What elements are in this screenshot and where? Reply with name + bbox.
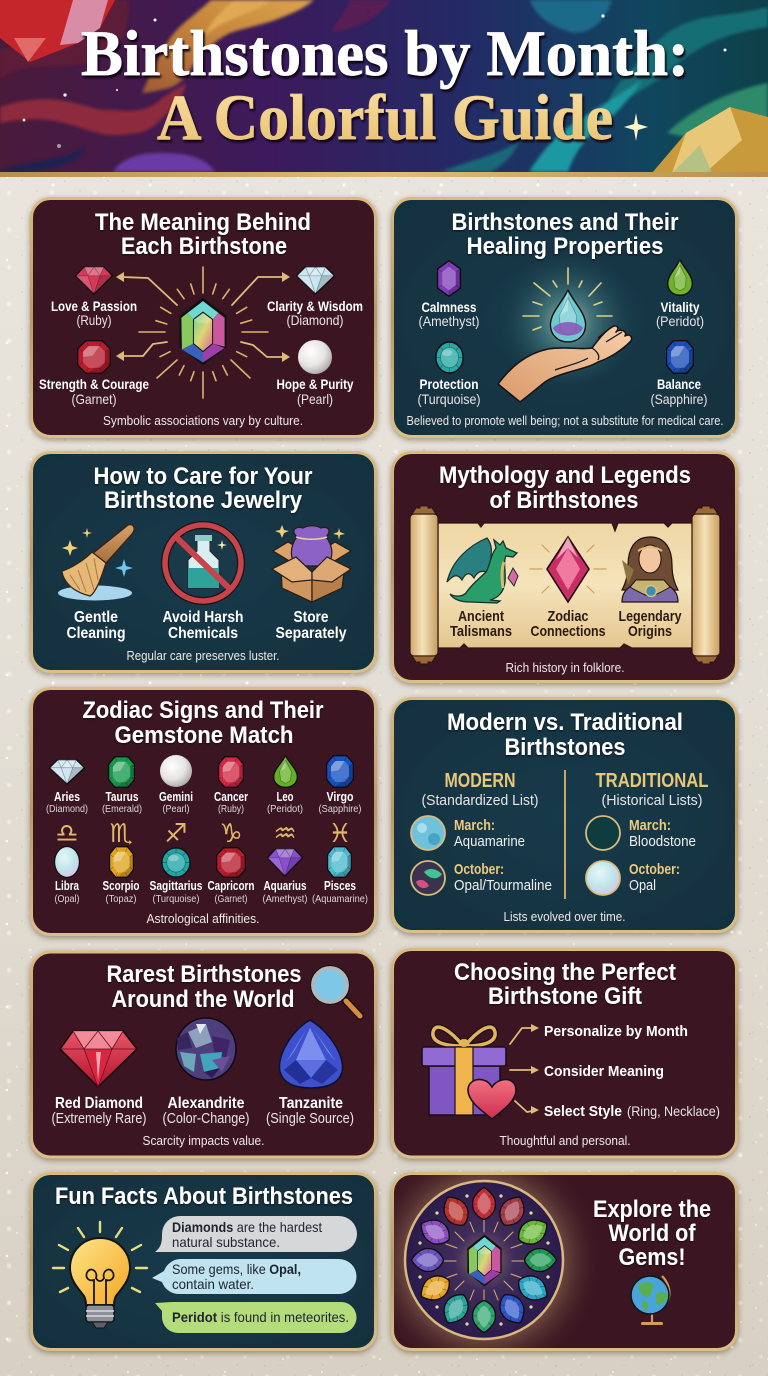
sign names row one: Cancer bbox=[214, 789, 248, 804]
icon: peridot bbox=[668, 260, 692, 295]
heading: explore: Gems! bbox=[618, 1244, 686, 1271]
column: modern bbox=[411, 770, 552, 895]
label: zodiac connections: Zodiac bbox=[548, 608, 588, 625]
note: zodiac: Astrological affinities. bbox=[146, 911, 260, 926]
icon: zodiac gem bbox=[530, 537, 606, 602]
tip: select style: (Ring, Necklace) bbox=[627, 1103, 720, 1119]
label: store separately: Store bbox=[294, 609, 329, 626]
note: mythology: Rich history in folklore. bbox=[506, 660, 624, 675]
sign names row two: Libra bbox=[55, 878, 80, 893]
heading: rarest: Rarest Birthstones bbox=[106, 961, 302, 988]
icon: light bulb bbox=[53, 1222, 147, 1328]
sign names row one: Gemini bbox=[159, 789, 193, 804]
label: balance: (Sapphire) bbox=[650, 391, 708, 407]
glow behind gem wheel bbox=[394, 1175, 587, 1348]
sign names row one: Leo bbox=[276, 789, 294, 804]
title: A Colorful Guide bbox=[157, 82, 613, 154]
label: strength and courage: (Garnet) bbox=[72, 391, 116, 407]
label: balance bbox=[650, 376, 708, 407]
sign names row two bbox=[54, 878, 368, 905]
scroll parchment bbox=[410, 506, 720, 664]
heading: healing: Healing Properties bbox=[466, 233, 664, 260]
column: modern: (Standardized List) bbox=[422, 792, 538, 809]
zodiac symbols: ♑︎ bbox=[219, 819, 243, 849]
label: love and passion: (Ruby) bbox=[76, 312, 112, 328]
column: traditional: March: bbox=[629, 817, 671, 834]
sign names row two: (Topaz) bbox=[106, 894, 136, 905]
zodiac symbols bbox=[55, 819, 352, 849]
sign names row one bbox=[46, 789, 362, 815]
arrows to gift tips bbox=[510, 1024, 539, 1114]
panel: zodiac signs bbox=[32, 688, 376, 934]
panel: meaning behind each birthstone bbox=[32, 198, 376, 436]
sign names row two: (Amethyst) bbox=[262, 894, 308, 905]
label: legendary origins: Legendary bbox=[618, 608, 682, 625]
sign names row two: (Opal) bbox=[54, 894, 80, 905]
label: red diamond bbox=[52, 1095, 146, 1127]
icon: pearl bbox=[298, 340, 332, 374]
gem row two bbox=[54, 846, 352, 878]
icon: turquoise bbox=[436, 342, 463, 373]
icon: amethyst bbox=[438, 261, 460, 296]
label: avoid harsh chemicals: Avoid Harsh bbox=[162, 609, 244, 626]
column: modern: March: bbox=[454, 817, 495, 834]
icon: gift box and heart bbox=[422, 1027, 516, 1119]
heading: mythology: Mythology and Legends bbox=[439, 462, 691, 489]
heading: modern vs traditional bbox=[447, 709, 683, 761]
sign names row two: Scorpio bbox=[102, 878, 140, 893]
tip: consider meaning: Consider Meaning bbox=[544, 1063, 664, 1080]
heading: explore bbox=[593, 1196, 711, 1271]
label: alexandrite: (Color-Change) bbox=[162, 1110, 250, 1127]
zodiac symbols: ♎︎ bbox=[55, 819, 79, 849]
heading: healing bbox=[452, 209, 678, 260]
speech bubble: peridot bbox=[155, 1302, 356, 1333]
icon: magnifying glass bbox=[310, 966, 360, 1016]
label: strength and courage: Strength & Courage bbox=[39, 376, 149, 392]
label: alexandrite: Alexandrite bbox=[168, 1095, 245, 1112]
label: avoid harsh chemicals bbox=[162, 609, 244, 642]
icon: alexandrite bbox=[176, 1018, 236, 1080]
label: hope and purity bbox=[276, 376, 354, 407]
label: protection: Protection bbox=[420, 376, 478, 392]
label: calmness: (Amethyst) bbox=[418, 313, 480, 329]
label: legendary origins: Origins bbox=[628, 623, 672, 640]
tip: select style: Select Style bbox=[544, 1103, 622, 1120]
heading: mythology: of Birthstones bbox=[490, 487, 638, 514]
label: vitality bbox=[656, 299, 704, 329]
note: care: Regular care preserves luster. bbox=[126, 648, 280, 663]
panel: jewelry care bbox=[32, 452, 376, 672]
icon: tanzanite bbox=[279, 1020, 343, 1088]
sign names row one: (Diamond) bbox=[46, 804, 88, 815]
label: red diamond: Red Diamond bbox=[55, 1095, 143, 1112]
label: zodiac connections: Connections bbox=[530, 623, 606, 640]
label: gentle cleaning: Cleaning bbox=[66, 625, 126, 642]
panel: rarest birthstones bbox=[32, 952, 376, 1157]
icon: red diamond bbox=[60, 1031, 137, 1087]
tip: select style bbox=[544, 1103, 720, 1120]
sign names row two: (Aquamarine) bbox=[312, 894, 368, 905]
label: vitality: Vitality bbox=[660, 299, 700, 315]
speech bubble: opal: Some gems, like Opal, bbox=[172, 1261, 301, 1277]
heading: modern vs traditional: Birthstones bbox=[504, 734, 626, 761]
note: healing: Believed to promote well being; not a substitute for medical care. bbox=[406, 413, 724, 428]
panel: explore the world of gems bbox=[387, 1170, 742, 1357]
speech bubble: diamonds bbox=[155, 1216, 357, 1252]
column: traditional: TRADITIONAL bbox=[596, 770, 708, 792]
column: modern: Aquamarine bbox=[454, 833, 525, 850]
note: meaning: Symbolic associations vary by culture. bbox=[103, 413, 303, 428]
header banner bbox=[0, 0, 768, 173]
label: love and passion: Love & Passion bbox=[51, 298, 137, 314]
heading: rarest bbox=[106, 961, 302, 1013]
label: hope and purity: Hope & Purity bbox=[276, 376, 354, 392]
heading: zodiac bbox=[82, 697, 324, 749]
label: legendary origins bbox=[618, 608, 682, 640]
zodiac symbols: ♒︎ bbox=[273, 819, 297, 849]
label: protection: (Turquoise) bbox=[418, 391, 480, 407]
panel: healing properties bbox=[392, 198, 736, 436]
heading: zodiac: Gemstone Match bbox=[114, 722, 294, 749]
title bbox=[81, 18, 689, 154]
sign names row one: Taurus bbox=[106, 789, 138, 804]
gem row one bbox=[49, 755, 353, 787]
sign names row two: Aquarius bbox=[264, 878, 306, 893]
heading: healing: Birthstones and Their bbox=[452, 209, 678, 236]
column: modern: October: bbox=[454, 861, 504, 878]
label: protection bbox=[418, 376, 480, 407]
column: traditional bbox=[586, 770, 708, 895]
title: Birthstones by Month: bbox=[81, 18, 689, 90]
label: strength and courage bbox=[39, 376, 149, 407]
tip: personalize: Personalize by Month bbox=[544, 1023, 688, 1040]
icon: gift box with pouch bbox=[272, 525, 351, 602]
zodiac symbols: ♏︎ bbox=[109, 819, 133, 849]
panel: modern vs traditional bbox=[392, 698, 736, 932]
label: store separately bbox=[276, 609, 347, 642]
label: ancient talismans bbox=[450, 608, 512, 640]
heading: gift bbox=[454, 959, 676, 1010]
label: tanzanite bbox=[266, 1095, 354, 1127]
column: modern: MODERN bbox=[444, 770, 516, 792]
speech bubble: opal: contain water. bbox=[172, 1276, 254, 1292]
zodiac symbols: ♓︎ bbox=[328, 819, 352, 849]
heading: explore: World of bbox=[608, 1220, 696, 1247]
heading: zodiac: Zodiac Signs and Their bbox=[82, 697, 324, 724]
sign names row one: Virgo bbox=[326, 789, 354, 804]
sign names row two: Sagittarius bbox=[150, 878, 202, 893]
icon: dragon bbox=[447, 538, 518, 603]
heading: care bbox=[94, 463, 312, 514]
note: rarest: Scarcity impacts value. bbox=[142, 1133, 264, 1148]
heading: meaning bbox=[95, 209, 311, 260]
column: modern: Opal/Tourmaline bbox=[454, 877, 552, 894]
icon: brush with sparkles bbox=[58, 525, 134, 600]
label: zodiac connections bbox=[530, 608, 606, 640]
sign names row two: Capricorn bbox=[208, 878, 255, 893]
label: vitality: (Peridot) bbox=[656, 313, 704, 329]
panel: mythology and legends bbox=[392, 452, 736, 682]
speech bubble: opal bbox=[152, 1259, 356, 1294]
sign names row one: (Emerald) bbox=[102, 804, 142, 815]
heading: gift: Birthstone Gift bbox=[488, 983, 642, 1010]
sign names row one: (Sapphire) bbox=[318, 804, 362, 815]
icon: central gem with rays and arrows bbox=[116, 267, 290, 398]
label: gentle cleaning bbox=[66, 609, 126, 642]
heading: care: Birthstone Jewelry bbox=[104, 487, 303, 514]
label: alexandrite bbox=[162, 1095, 250, 1127]
sign names row one: Aries bbox=[54, 789, 80, 804]
label: love and passion bbox=[51, 298, 137, 328]
heading: explore: Explore the bbox=[593, 1196, 711, 1223]
sparkle on header bbox=[624, 113, 648, 141]
heading: modern vs traditional: Modern vs. Traditional bbox=[447, 709, 683, 736]
sign names row two: (Turquoise) bbox=[152, 894, 200, 905]
label: hope and purity: (Pearl) bbox=[297, 391, 333, 407]
label: avoid harsh chemicals: Chemicals bbox=[168, 625, 238, 642]
heading: gift: Choosing the Perfect bbox=[454, 959, 676, 986]
heading: meaning: The Meaning Behind bbox=[95, 209, 311, 236]
column: traditional: October: bbox=[629, 861, 680, 878]
sign names row one: (Peridot) bbox=[267, 804, 303, 815]
icon: garnet bbox=[78, 341, 110, 373]
label: balance: Balance bbox=[657, 376, 701, 392]
panel: choosing a gift bbox=[392, 950, 736, 1157]
label: gentle cleaning: Gentle bbox=[74, 609, 118, 626]
label: calmness: Calmness bbox=[422, 299, 477, 315]
speech bubble: diamonds: natural substance. bbox=[172, 1234, 280, 1250]
sign names row two: (Garnet) bbox=[214, 894, 248, 905]
label: clarity and wisdom: (Diamond) bbox=[286, 312, 344, 328]
icon: sapphire bbox=[667, 341, 693, 373]
icon: ruby bbox=[75, 267, 113, 294]
label: calmness bbox=[418, 299, 480, 329]
note: modern vs traditional: Lists evolved over time. bbox=[504, 909, 626, 924]
label: ancient talismans: Talismans bbox=[450, 623, 512, 640]
sign names row one: (Pearl) bbox=[162, 804, 190, 815]
label: clarity and wisdom: Clarity & Wisdom bbox=[267, 298, 363, 314]
note: gift: Thoughtful and personal. bbox=[500, 1133, 630, 1148]
label: tanzanite: (Single Source) bbox=[266, 1110, 354, 1127]
icon: gem wheel bbox=[405, 1181, 563, 1339]
column: traditional: Bloodstone bbox=[629, 833, 696, 850]
heading: mythology bbox=[439, 462, 691, 514]
sign names row two: Pisces bbox=[324, 878, 356, 893]
header gold band bbox=[0, 172, 768, 177]
icon: hand holding glowing gem bbox=[496, 250, 640, 402]
label: tanzanite: Tanzanite bbox=[279, 1095, 343, 1112]
speech bubble: diamonds: Diamonds are the hardest bbox=[172, 1219, 322, 1235]
label: store separately: Separately bbox=[276, 625, 347, 642]
icon: diamond bbox=[296, 267, 335, 294]
heading: fun facts: Fun Facts About Birthstones bbox=[55, 1183, 353, 1210]
sign names row one: (Ruby) bbox=[218, 804, 244, 815]
heading: care: How to Care for Your bbox=[94, 463, 312, 490]
icon: legendary woman bbox=[622, 537, 678, 602]
column: traditional: Opal bbox=[629, 877, 656, 894]
heading: meaning: Each Birthstone bbox=[121, 233, 287, 260]
icon: globe bbox=[631, 1276, 669, 1325]
zodiac symbols: ♐︎ bbox=[164, 819, 188, 849]
panel: fun facts bbox=[32, 1174, 376, 1350]
label: ancient talismans: Ancient bbox=[458, 608, 504, 625]
speech bubble: peridot: Peridot is found in meteorites. bbox=[172, 1309, 349, 1325]
label: red diamond: (Extremely Rare) bbox=[52, 1110, 146, 1127]
column divider bbox=[564, 770, 566, 899]
column: traditional: (Historical Lists) bbox=[602, 792, 702, 809]
label: clarity and wisdom bbox=[267, 298, 363, 328]
icon: no harsh chemicals bbox=[165, 525, 241, 601]
heading: rarest: Around the World bbox=[112, 986, 294, 1013]
